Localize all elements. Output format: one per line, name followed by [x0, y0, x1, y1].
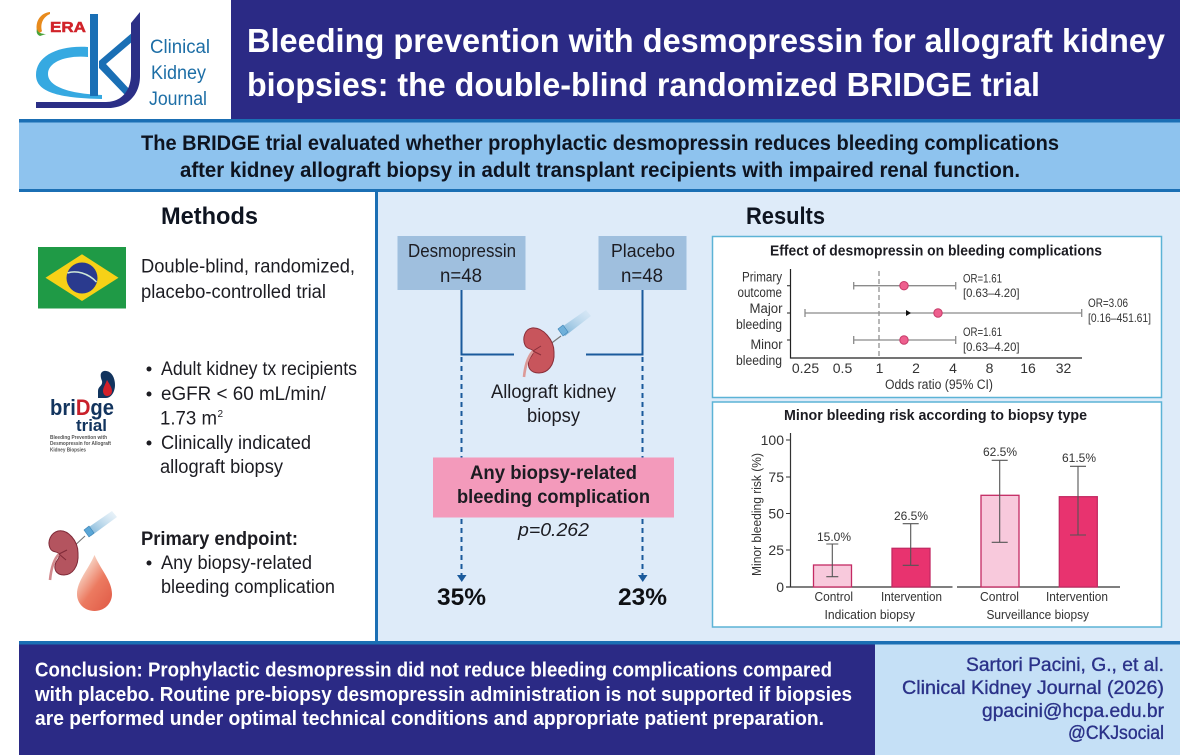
panel: conclusion: with placebo. Routine pre-biopsy desmopressin administration is not supported if biopsies [34, 684, 852, 706]
text: population: eGFR < 60 mL/min/ [161, 384, 327, 405]
chart: bar chart [712, 402, 1162, 627]
chart: bar chart: 61.5% [1062, 451, 1096, 465]
text: primary endpoint [141, 529, 335, 598]
logo: Clinical Kidney Journal: Journal [149, 89, 207, 110]
chart: forest plot: 0.5 [833, 360, 852, 376]
label: allograft kidney biopsy: Allograft kidney [491, 382, 616, 403]
rule above conclusion [19, 641, 1180, 644]
chart: bar chart: Surveillance biopsy [986, 607, 1089, 622]
title banner: Bleeding prevention with desmopressin for allograft kidney [247, 22, 1166, 59]
chart: forest plot: Major [750, 301, 783, 316]
box: outcome: bleeding complication [457, 487, 650, 508]
box: desmopressin arm: Desmopressin [408, 240, 516, 261]
chart: bar chart: Minor bleeding risk (%) [749, 453, 764, 576]
text: population: Adult kidney tx recipients [161, 359, 357, 380]
icon: kidney biopsy and blood drop [49, 511, 117, 611]
intro band: after kidney allograft biopsy in adult transplant recipients with impaired renal function. [180, 158, 1020, 182]
panel: citation: Sartori Pacini, G., et al. [966, 654, 1164, 676]
result: placebo 23%: 23% [618, 584, 667, 611]
title banner: biopsies: the double-blind randomized BRIDGE trial [247, 66, 1040, 103]
chart: bar chart: 15.0% [817, 530, 851, 544]
text: trial design: placebo-controlled trial [141, 282, 326, 303]
box: placebo arm: n=48 [621, 266, 663, 287]
heading: Results: Results [746, 203, 825, 230]
box: desmopressin arm [398, 236, 526, 290]
text: trial design [141, 256, 355, 303]
chart: bar chart: 26.5% [894, 509, 928, 523]
chart: forest plot: 1 [876, 360, 884, 376]
p value: p=0.262 [517, 520, 589, 540]
icon: BRIDGE trial logo: trial [76, 417, 107, 435]
chart: forest plot: bleeding [736, 353, 782, 368]
icon: BRIDGE trial logo: Bleeding Prevention with [50, 435, 108, 441]
text: trial design: Double-blind, randomized, [141, 256, 355, 278]
chart: forest plot: Primary [742, 270, 782, 284]
chart: bar chart: Indication biopsy [824, 607, 915, 622]
text: population [146, 359, 357, 478]
chart: forest plot: OR=1.61 [963, 272, 1002, 286]
panel: conclusion [19, 641, 875, 755]
logo: Clinical Kidney Journal: Kidney [151, 63, 206, 84]
chart: bar chart: 25 [768, 542, 784, 558]
chart: forest plot: 32 [1056, 360, 1071, 376]
text: primary endpoint: Any biopsy-related [161, 553, 312, 574]
label: allograft kidney biopsy: biopsy [527, 406, 580, 427]
chart: forest plot: bleeding [736, 317, 782, 332]
flow diagram [398, 236, 686, 611]
box: outcome: Any biopsy-related [470, 463, 637, 484]
panel: results background [375, 192, 1180, 642]
chart: forest plot [712, 236, 1162, 398]
box: outcome [433, 458, 674, 518]
box: placebo arm [598, 236, 686, 290]
panel: methods [19, 192, 375, 641]
title banner [231, 0, 1180, 119]
chart: forest plot: 16 [1020, 360, 1036, 376]
chart: bar chart: Intervention [881, 589, 942, 604]
chart: bar chart: 0 [776, 579, 784, 595]
text: population: Clinically indicated [161, 433, 311, 454]
text: primary endpoint: bleeding complication [161, 577, 335, 598]
chart: bar chart: Intervention [1046, 589, 1108, 604]
intro band [19, 119, 1180, 192]
panel: conclusion: are performed under optimal technical conditions and appropriate patient preparation. [35, 708, 824, 730]
box: placebo arm: Placebo [611, 240, 675, 261]
icon: BRIDGE trial logo [50, 371, 115, 454]
icon: BRIDGE trial logo: Kidney Biopsies [50, 448, 86, 454]
text: population: 1.73 m [160, 408, 217, 430]
chart: bar chart: 62.5% [983, 445, 1017, 459]
chart: bar chart: 100 [761, 432, 784, 448]
chart: forest plot: 8 [986, 360, 994, 376]
chart: forest plot: Minor [750, 337, 783, 352]
text: primary endpoint: Primary endpoint: [141, 529, 298, 550]
panel: citation: Clinical Kidney Journal (2026) [902, 677, 1164, 699]
panel: conclusion: Conclusion: Prophylactic desmopressin did not reduce bleeding complications compared [35, 660, 832, 682]
chart: forest plot: Effect of desmopressin on bleeding complications [770, 244, 1102, 260]
chart: forest plot: OR=1.61 [963, 325, 1002, 339]
chart: forest plot: [0.63–4.20] [963, 340, 1020, 354]
logo: Clinical Kidney Journal [36, 12, 210, 110]
box: desmopressin arm: n=48 [440, 266, 482, 287]
result: desmopressin 35%: 35% [437, 584, 486, 611]
chart: forest plot: [0.63–4.20] [963, 286, 1020, 300]
icon: BRIDGE trial logo: Desmopressin for Allograft [50, 441, 111, 447]
icon: kidney with biopsy needle [524, 310, 591, 377]
icon: Brazil flag [38, 247, 126, 308]
chart: bar chart: Minor bleeding risk according to biopsy type [784, 408, 1087, 424]
chart: bar chart: 75 [768, 469, 784, 485]
text: population: 2 [218, 409, 224, 420]
chart: forest plot: Odds ratio (95% CI) [885, 377, 993, 392]
logo: Clinical Kidney Journal: ERA [50, 20, 87, 36]
logo: Clinical Kidney Journal: Clinical [150, 37, 210, 58]
chart: forest plot: 4 [949, 360, 957, 376]
chart: forest plot: 0.25 [792, 360, 819, 376]
chart: bar chart: 50 [768, 506, 784, 522]
panel: citation: @CKJsocial [1068, 722, 1164, 744]
flow lines [460, 290, 644, 575]
chart: forest plot: [0.16–451.61] [1088, 311, 1151, 325]
arrowheads [457, 575, 648, 582]
panel: citation [875, 641, 1180, 755]
chart: bar chart: Control [814, 589, 853, 604]
chart: bar chart: Control [980, 589, 1019, 604]
panel: citation: gpacini@hcpa.edu.br [982, 700, 1164, 722]
heading: Methods: Methods [161, 203, 258, 230]
text: population: allograft biopsy [160, 457, 283, 478]
chart: forest plot: OR=3.06 [1088, 296, 1128, 310]
intro band: The BRIDGE trial evaluated whether prophylactic desmopressin reduces bleeding complications [141, 131, 1059, 155]
label: allograft kidney biopsy [491, 382, 616, 427]
chart: forest plot: outcome [738, 285, 782, 300]
icon: BRIDGE trial logo: briDge [50, 395, 114, 420]
chart: forest plot: 2 [912, 360, 920, 376]
